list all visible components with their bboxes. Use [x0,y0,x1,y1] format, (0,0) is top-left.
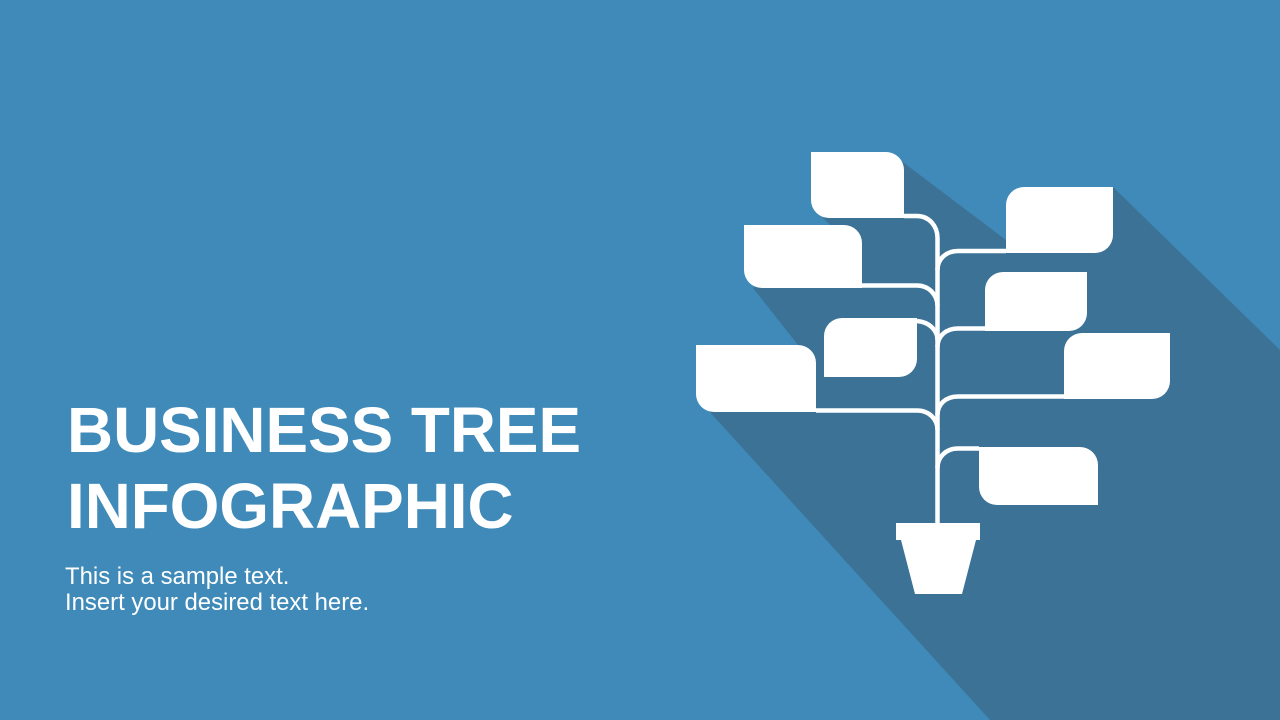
long shadow [708,156,1280,720]
leaf: upper right [985,272,1087,331]
flower pot [896,523,980,594]
title: BUSINESS TREE [67,394,581,466]
subtitle text: This is a sample text. [65,563,289,590]
tree branches and stem [816,216,1064,523]
leaf: upper left [744,225,862,288]
leaf: top right [1006,187,1113,253]
leaf: top left [811,152,904,218]
subtitle text [65,563,369,616]
title: INFOGRAPHIC [67,470,514,542]
leaf: lower left [696,345,816,412]
subtitle text: Insert your desired text here. [65,589,369,616]
leaf: lower right [979,447,1098,505]
leaf: middle left [824,318,917,377]
leaf: middle right [1064,333,1170,399]
title [67,394,581,542]
